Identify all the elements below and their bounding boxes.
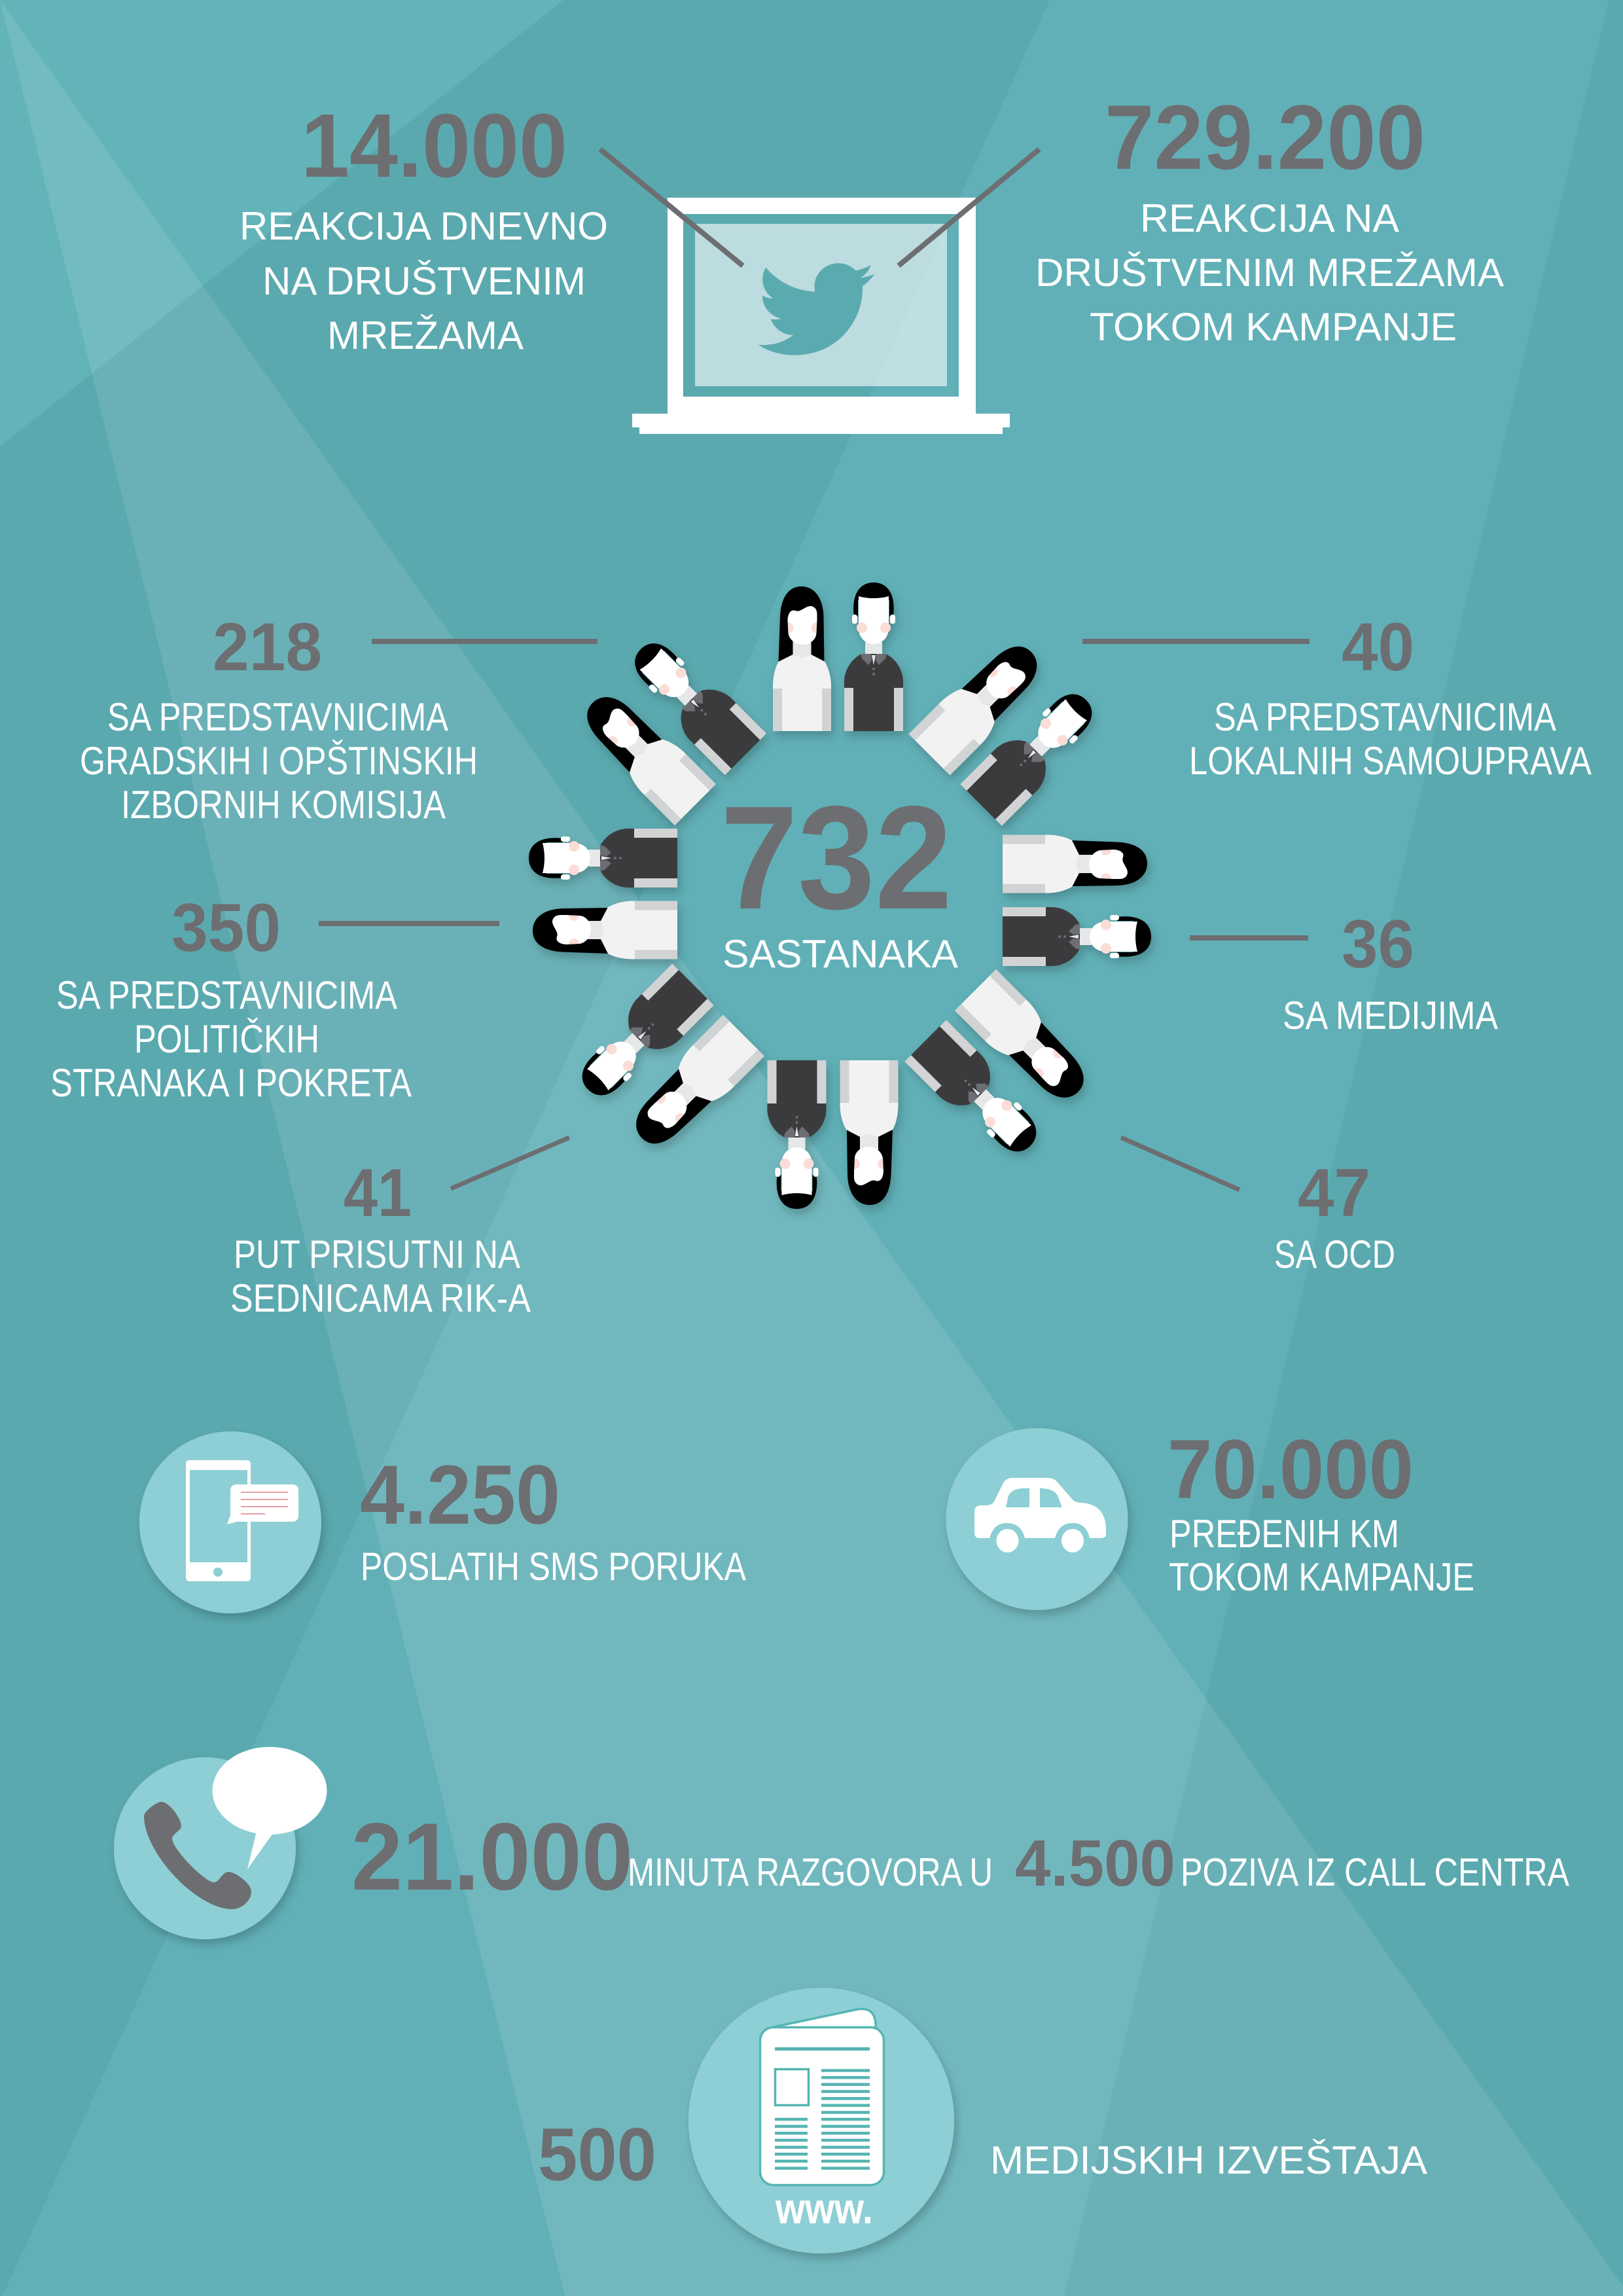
callout: 40 [1082, 609, 1592, 783]
callout: 41: PUT PRISUTNI NA [234, 1232, 520, 1276]
callout: 350: POLITIČKIH [134, 1017, 319, 1061]
callout: 218: IZBORNIH KOMISIJA [121, 783, 446, 827]
icon: newspaper with www: www. [775, 2184, 873, 2233]
stat: 4.500 calls [1015, 1827, 1569, 1900]
stat: 732 meetings: 732 [721, 775, 952, 940]
text: daily reactions: NA DRUŠTVENIM [262, 259, 586, 303]
person: man bottom [767, 1060, 826, 1209]
text: campaign reactions: DRUŠTVENIM MREŽAMA [1035, 251, 1504, 295]
person: woman upper left [573, 682, 716, 825]
icon: newspaper with www [688, 1988, 954, 2253]
connector line left [600, 149, 743, 266]
text: campaign reactions: REAKCIJA NA [1140, 196, 1399, 240]
stat: 70.000 km [1168, 1423, 1474, 1599]
person: man upper left [620, 628, 766, 775]
callout: 41: SEDNICAMA RIK-A [230, 1276, 531, 1320]
person: woman right [1003, 835, 1147, 893]
people around the table [529, 583, 1151, 1209]
connector line right [899, 149, 1039, 266]
stat: 21.000 minutes [351, 1803, 993, 1910]
callout: 36: 36 [1342, 906, 1414, 982]
callout: 350: 350 [171, 890, 281, 966]
icon: telephone with speech bubble [114, 1747, 327, 1939]
stat: 4.250 SMS [360, 1448, 746, 1588]
callout: 218: GRADSKIH I OPŠTINSKIH [80, 739, 478, 783]
callout: 47: 47 [1298, 1155, 1370, 1231]
callout: 350 [50, 890, 499, 1105]
stat: 4.500 calls: 4.500 [1015, 1827, 1175, 1900]
callout: 36: SA MEDIJIMA [1283, 994, 1498, 1037]
stat: 21.000 minutes: 21.000 [351, 1803, 633, 1910]
icon: laptop with twitter bird [632, 198, 1010, 434]
callout: 40: SA PREDSTAVNICIMA [1214, 695, 1556, 739]
stat: 70.000 km: TOKOM KAMPANJE [1169, 1555, 1474, 1599]
stat: 732 meetings: SASTANAKA [722, 932, 958, 976]
person: woman bottom [840, 1060, 898, 1205]
callout: 218: 218 [213, 609, 322, 685]
callout: 350: SA PREDSTAVNICIMA [56, 973, 397, 1017]
callout: 40: 40 [1342, 609, 1414, 685]
callout: 47 [1121, 1138, 1395, 1276]
text: campaign reactions: TOKOM KAMPANJE [1090, 305, 1457, 349]
text: daily reactions: MREŽAMA [327, 314, 524, 357]
person: woman left [533, 901, 677, 960]
callout: 41: 41 [344, 1155, 412, 1231]
icon: phone with message [139, 1431, 321, 1613]
stat: 70.000 km: PREĐENIH KM [1169, 1512, 1399, 1556]
callout: 350: STRANAKA I POKRETA [50, 1061, 412, 1105]
person: woman upper right [909, 632, 1052, 775]
callout: 36 [1190, 906, 1498, 1037]
person: man top [844, 583, 903, 731]
stat: 500: 500 [538, 2113, 656, 2197]
text: daily reactions [240, 204, 608, 357]
text: media reports: MEDIJSKIH IZVEŠTAJA [990, 2138, 1427, 2182]
stat: 4.250 SMS: POSLATIH SMS PORUKA [361, 1545, 746, 1588]
person: man lower right [904, 1020, 1051, 1166]
person: woman lower right [955, 969, 1098, 1113]
callout: 41 [230, 1138, 569, 1320]
stat: 70.000 km: 70.000 [1168, 1423, 1414, 1516]
stat: 21.000 minutes: MINUTA RAZGOVORA U [628, 1850, 993, 1894]
stat: 4.250 SMS: 4.250 [360, 1448, 560, 1542]
person: man upper right [960, 679, 1107, 826]
text: daily reactions: REAKCIJA DNEVNO [240, 204, 608, 248]
text: campaign reactions [1035, 196, 1504, 349]
person: man left [529, 829, 677, 888]
person: woman top [773, 586, 831, 731]
callout: 47: SA OCD [1274, 1232, 1395, 1276]
icon: car [946, 1428, 1128, 1610]
person: woman lower left [621, 1015, 764, 1158]
callout: 218: SA PREDSTAVNICIMA [107, 695, 448, 739]
person: man lower left [567, 963, 714, 1110]
person: man right [1003, 907, 1151, 966]
section: social media reactions [240, 86, 1504, 434]
stat: 14.000: 14.000 [301, 96, 567, 196]
callout: 218 [80, 609, 597, 827]
stat: 729.200: 729.200 [1105, 86, 1425, 188]
